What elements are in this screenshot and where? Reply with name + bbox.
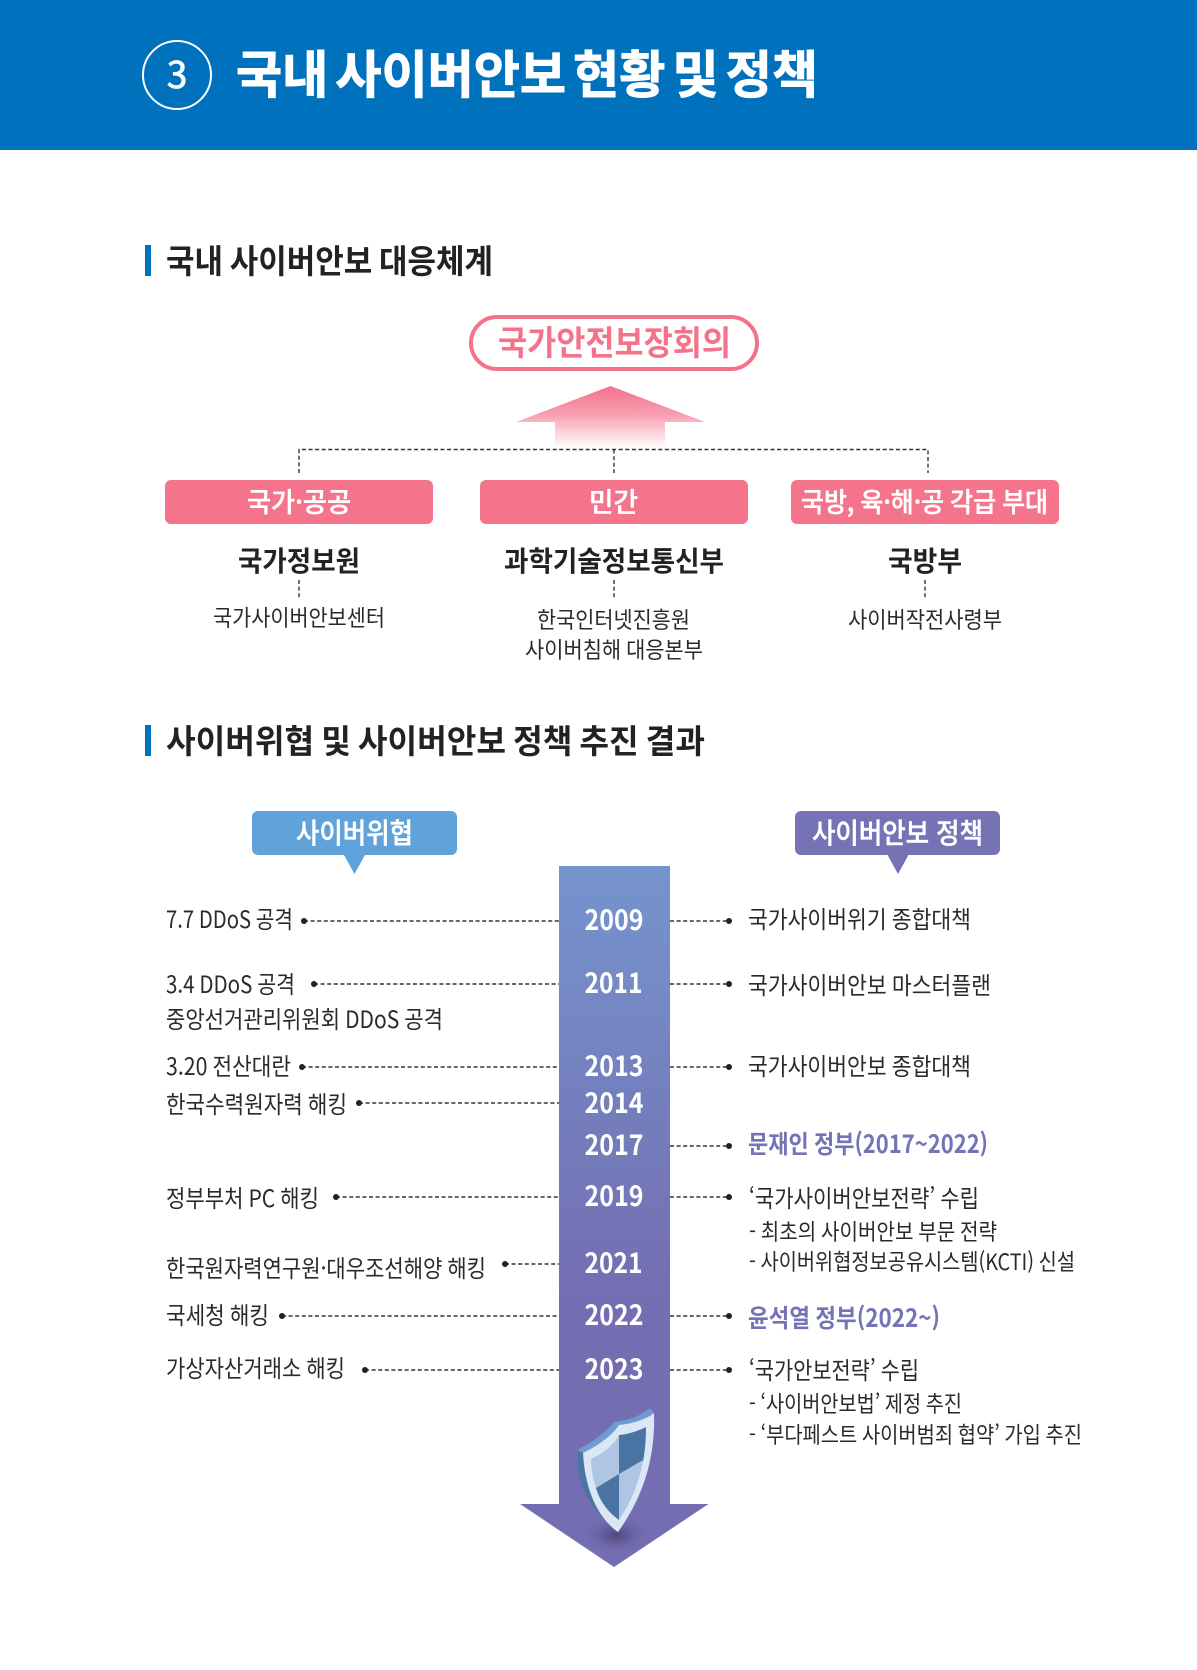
years: 2019 [584, 1175, 644, 1215]
timeline connectors: right [670, 918, 732, 1373]
policy list: 국가사이버위기 종합대책 [748, 900, 971, 935]
policy list: - ‘사이버안보법’ 제정 추진 [749, 1387, 962, 1419]
column: national and public: 국가정보원 [238, 540, 360, 580]
threats list: 3.20 전산대란 [166, 1047, 291, 1082]
policy list: - ‘부다페스트 사이버범죄 협약’ 가입 추진 [749, 1418, 1082, 1450]
column: national and public [165, 480, 433, 633]
threats list: 정부부처 PC 해킹 [166, 1179, 319, 1214]
section number badge: 3 [167, 45, 187, 99]
years: 2017 [584, 1124, 644, 1164]
arrow: upward gradient [516, 386, 705, 448]
column: defense [791, 480, 1059, 635]
callout: cyber security policy [795, 811, 1000, 874]
policy list: 문재인 정부(2017~2022) [748, 1125, 988, 1161]
threats list: 3.4 DDoS 공격 [166, 965, 295, 1000]
timeline connectors: left [279, 918, 559, 1373]
policy list: 국가사이버안보 마스터플랜 [748, 966, 991, 1001]
title: 국내 사이버안보 현황 및 정책 [236, 34, 818, 108]
threats list: 7.7 DDoS 공격 [166, 900, 293, 935]
column: private: 한국인터넷진흥원 [537, 603, 690, 635]
top node: national security council: 국가안전보장회의 [498, 316, 731, 365]
column: defense: 국방, 육·해·공 각급 부대 [801, 481, 1048, 520]
policy list: 윤석열 정부(2022~) [748, 1299, 940, 1335]
threats list: 한국수력원자력 해킹 [166, 1085, 347, 1120]
callout: cyber threats: 사이버위협 [296, 812, 413, 852]
years [584, 899, 644, 1388]
years: 2009 [584, 899, 644, 939]
years: 2014 [584, 1082, 644, 1122]
threats list [166, 900, 486, 1384]
panel: response system org chart [165, 316, 1059, 665]
dashed connector [299, 450, 928, 473]
years: 2011 [584, 962, 642, 1002]
threats list: 국세청 해킹 [166, 1296, 269, 1331]
section heading: threats and policy: 사이버위협 및 사이버안보 정책 추진 결과 [166, 715, 705, 763]
column: private: 사이버침해 대응본부 [525, 633, 703, 665]
policy list: - 사이버위협정보공유시스템(KCTI) 신설 [749, 1245, 1075, 1277]
icon: shield [578, 1408, 654, 1556]
policy list [748, 900, 1082, 1450]
timeline arrow [520, 866, 708, 1567]
callout: cyber threats [252, 811, 457, 874]
section number badge [143, 41, 211, 109]
column: defense: 국방부 [888, 540, 962, 580]
threats list: 한국원자력연구원·대우조선해양 해킹 [166, 1249, 486, 1284]
threats list: 중앙선거관리위원회 DDoS 공격 [166, 1000, 443, 1035]
column: private: 과학기술정보통신부 [504, 540, 724, 580]
policy list: 국가사이버안보 종합대책 [748, 1047, 971, 1082]
policy list: ‘국가안보전략’ 수립 [749, 1351, 919, 1386]
column: national and public: 국가사이버안보센터 [213, 601, 385, 633]
column: defense: 사이버작전사령부 [848, 603, 1002, 635]
section heading: response system: 국내 사이버안보 대응체계 [166, 235, 493, 283]
years: 2021 [584, 1242, 642, 1282]
header banner [0, 0, 1197, 150]
column: private: 민간 [589, 481, 638, 520]
years: 2013 [584, 1045, 644, 1085]
column: national and public: 국가·공공 [247, 481, 351, 520]
years: 2022 [584, 1294, 644, 1334]
policy list: ‘국가사이버안보전략’ 수립 [749, 1179, 979, 1214]
threats list: 가상자산거래소 해킹 [166, 1349, 345, 1384]
policy list: - 최초의 사이버안보 부문 전략 [749, 1215, 997, 1247]
years: 2023 [584, 1348, 644, 1388]
column: private [480, 480, 748, 665]
callout: cyber security policy: 사이버안보 정책 [812, 812, 983, 852]
